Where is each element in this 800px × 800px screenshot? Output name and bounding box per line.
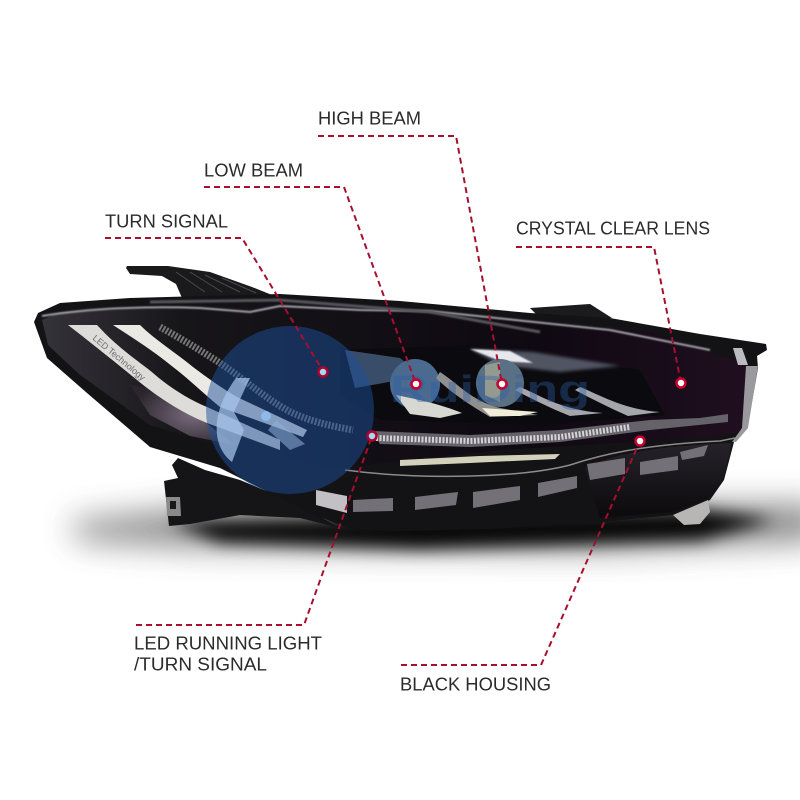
ground shadow [70,505,800,550]
callout: LED running light: /TURN SIGNAL [134,654,267,674]
lower chrome line [400,454,560,466]
blue watermark circle [206,326,374,494]
callout: low beam: LOW BEAM [204,160,303,180]
white DRL strip outer [68,325,280,450]
LED Technology engraving: LED Technology [91,333,148,383]
watermark text: RuiDing [390,369,590,411]
mounting fin [126,266,272,298]
projector lenses and chrome blades [345,350,660,418]
lower housing shading [585,443,732,518]
callout: turn signal: TURN SIGNAL [105,210,228,232]
callout: turn signal [105,210,328,376]
chrome corner clip [733,348,748,365]
callout: high beam: HIGH BEAM [318,108,421,128]
callout: black housing: BLACK HOUSING [400,674,551,694]
right lens edge [732,366,758,442]
running light bar LEDs [376,427,630,441]
projector housing dark [340,345,665,425]
bracket clip [166,497,181,516]
running light bar [372,414,728,447]
white DRL strip inner [113,325,307,437]
lamp body [34,294,767,531]
callout: high beam [318,108,506,388]
LED bar upper section [160,327,353,430]
callout: LED running light: LED RUNNING LIGHT [134,632,322,654]
lens lower-left tinted area [130,385,235,445]
lower housing LED modules [316,445,708,513]
headlight assembly [34,266,767,531]
callout: crystal clear lens [516,218,710,388]
lower housing knob [673,500,710,525]
lens upper [42,304,752,468]
callout: LED running light [134,432,376,674]
top reflection in projector area [470,349,620,372]
lower bracket [164,458,340,528]
rear mounting tab [530,304,612,318]
callout: crystal clear lens: CRYSTAL CLEAR LENS [516,218,710,238]
callout: low beam [204,160,420,388]
callout: black housing [400,436,644,694]
top chrome reflections [42,306,710,350]
housing divider line [345,438,735,476]
